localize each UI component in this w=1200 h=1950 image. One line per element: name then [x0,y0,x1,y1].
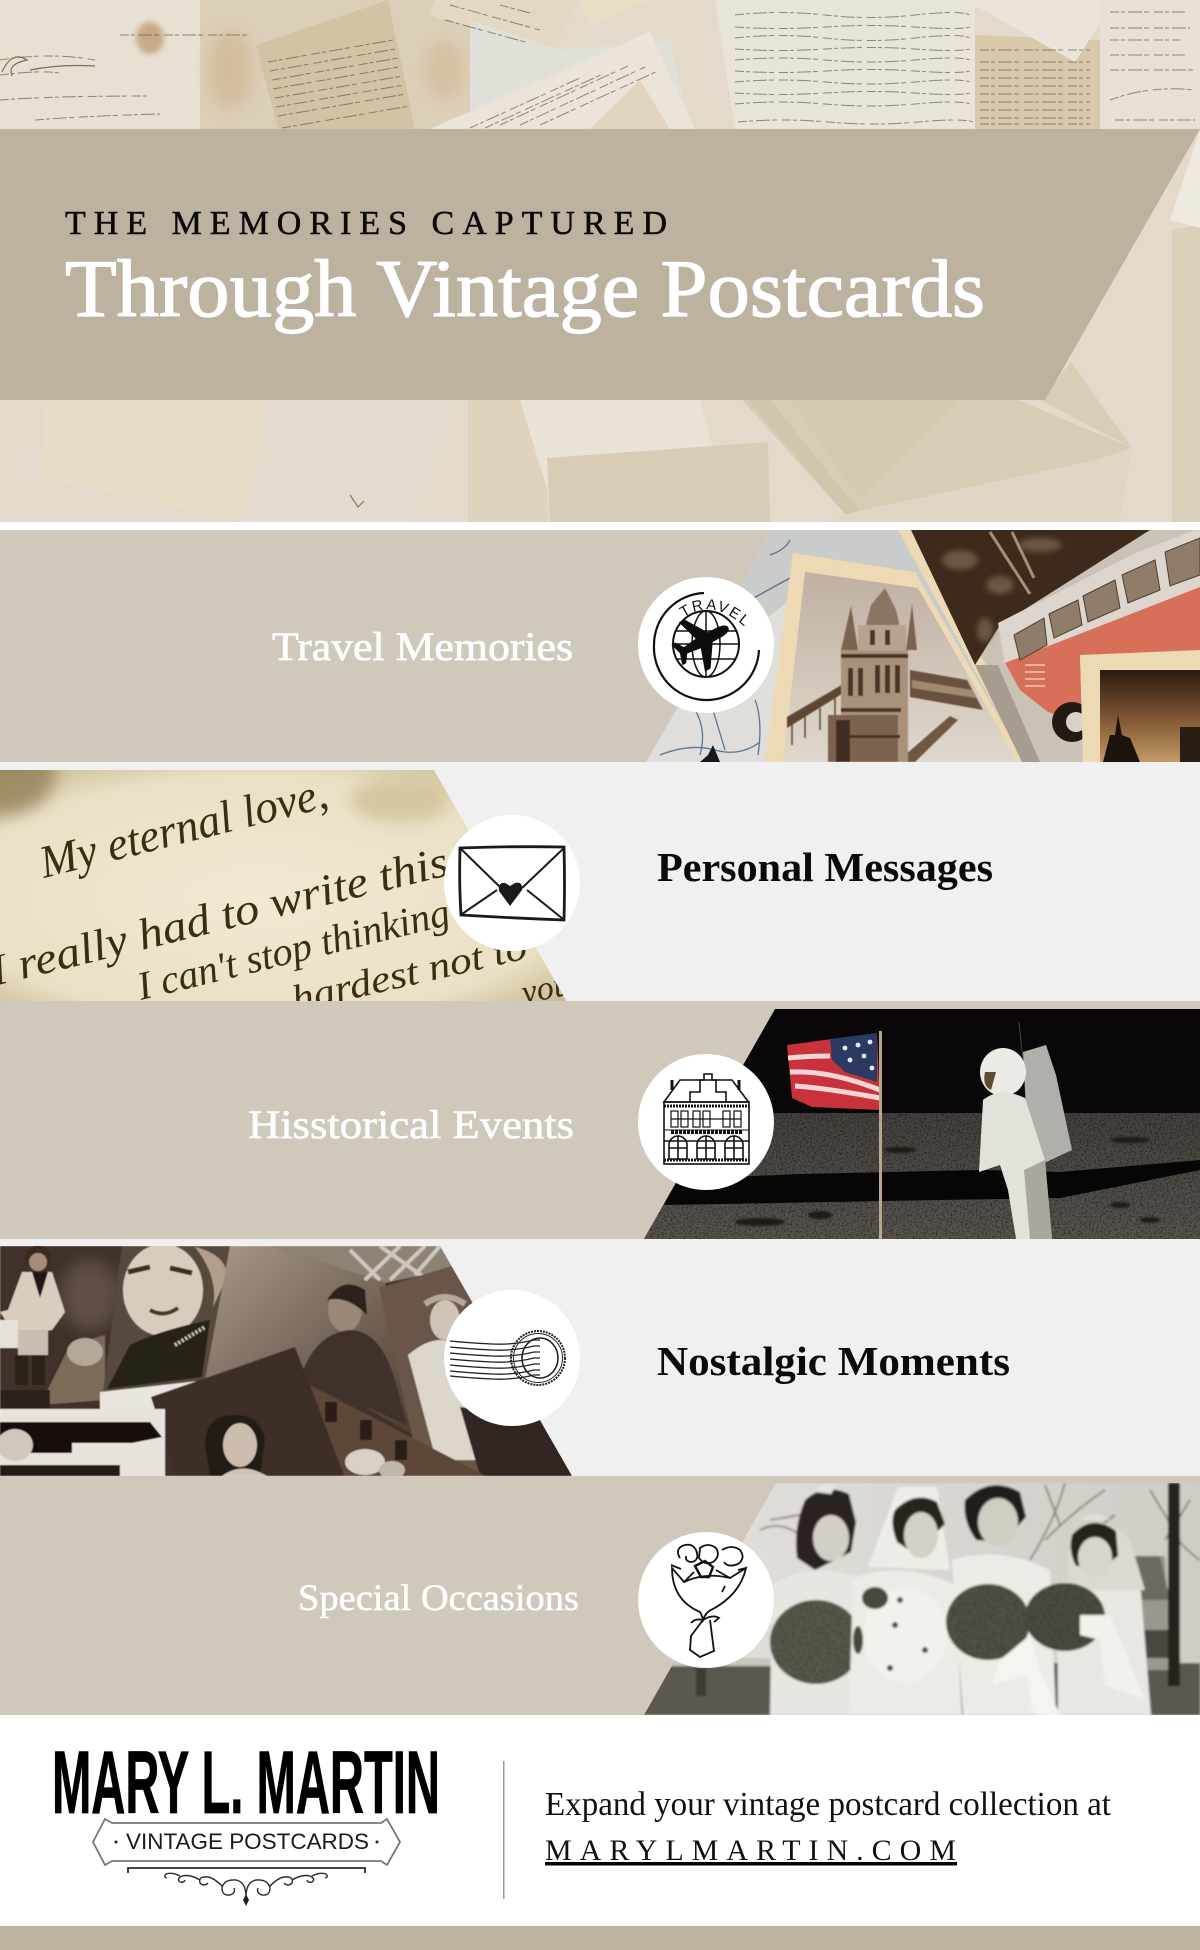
bottom bar [0,1926,1200,1950]
bride 1 [770,1570,860,1715]
panel: travel memories [0,530,1200,762]
title: THE MEMORIES CAPTURED [65,205,667,242]
handwritten letter photo: you [515,965,574,1012]
icon: travel stamp: TRAVEL [678,599,746,626]
flag [787,1031,882,1239]
old family photos [0,1244,580,1479]
panel: personal messages [0,762,1200,1001]
icon: travel stamp [638,577,774,713]
header banner [0,129,1200,400]
panel: nostalgic moments [0,1239,1200,1479]
divider [503,1761,504,1899]
bride 4 [1057,1574,1151,1715]
logo: MARY L. MARTIN [52,1732,440,1832]
logo ornament [128,1868,365,1897]
travel collage photo [640,528,1200,762]
heading: Personal Messages [657,844,993,890]
moon landing photo [640,1009,1200,1239]
handwritten letter photo: hardest not to [288,926,531,1021]
logo [52,1732,440,1906]
icon: building [638,1054,774,1190]
handwritten letter photo: I can't stop thinking [131,889,454,1009]
panel: special occasions [0,1476,1200,1730]
logo badge [93,1819,400,1865]
icon: bouquet [638,1532,774,1668]
footer [0,1715,1200,1926]
bride 2 [868,1487,950,1570]
white gap under header [0,522,1200,530]
call to action: MARYLMARTIN.COM [545,1834,956,1867]
icon: envelope [444,815,580,951]
title [65,205,985,334]
heading: Hisstorical Events [248,1102,574,1147]
script flourish [2,57,95,76]
logo: VINTAGE POSTCARDS [126,1829,369,1854]
tower bridge [787,588,983,762]
bride 3 [952,1554,1056,1715]
handwriting strokes [0,4,1195,128]
call to action [545,1786,1112,1867]
heading: Travel Memories [272,624,573,669]
heading: Special Occasions [298,1578,579,1619]
handwritten letter photo [0,770,566,1001]
panel: historical events [0,1001,1200,1239]
title: Through Vintage Postcards [65,243,985,334]
astronaut [979,1022,1072,1239]
bridesmaids photo [640,1483,1200,1730]
call to action: Expand your vintage postcard collection at [545,1786,1112,1823]
handwritten letter photo: My eternal love, [33,767,333,888]
heading: Nostalgic Moments [657,1338,1010,1384]
header collage of old letters [0,0,1200,522]
icon: postmark [444,1290,580,1426]
